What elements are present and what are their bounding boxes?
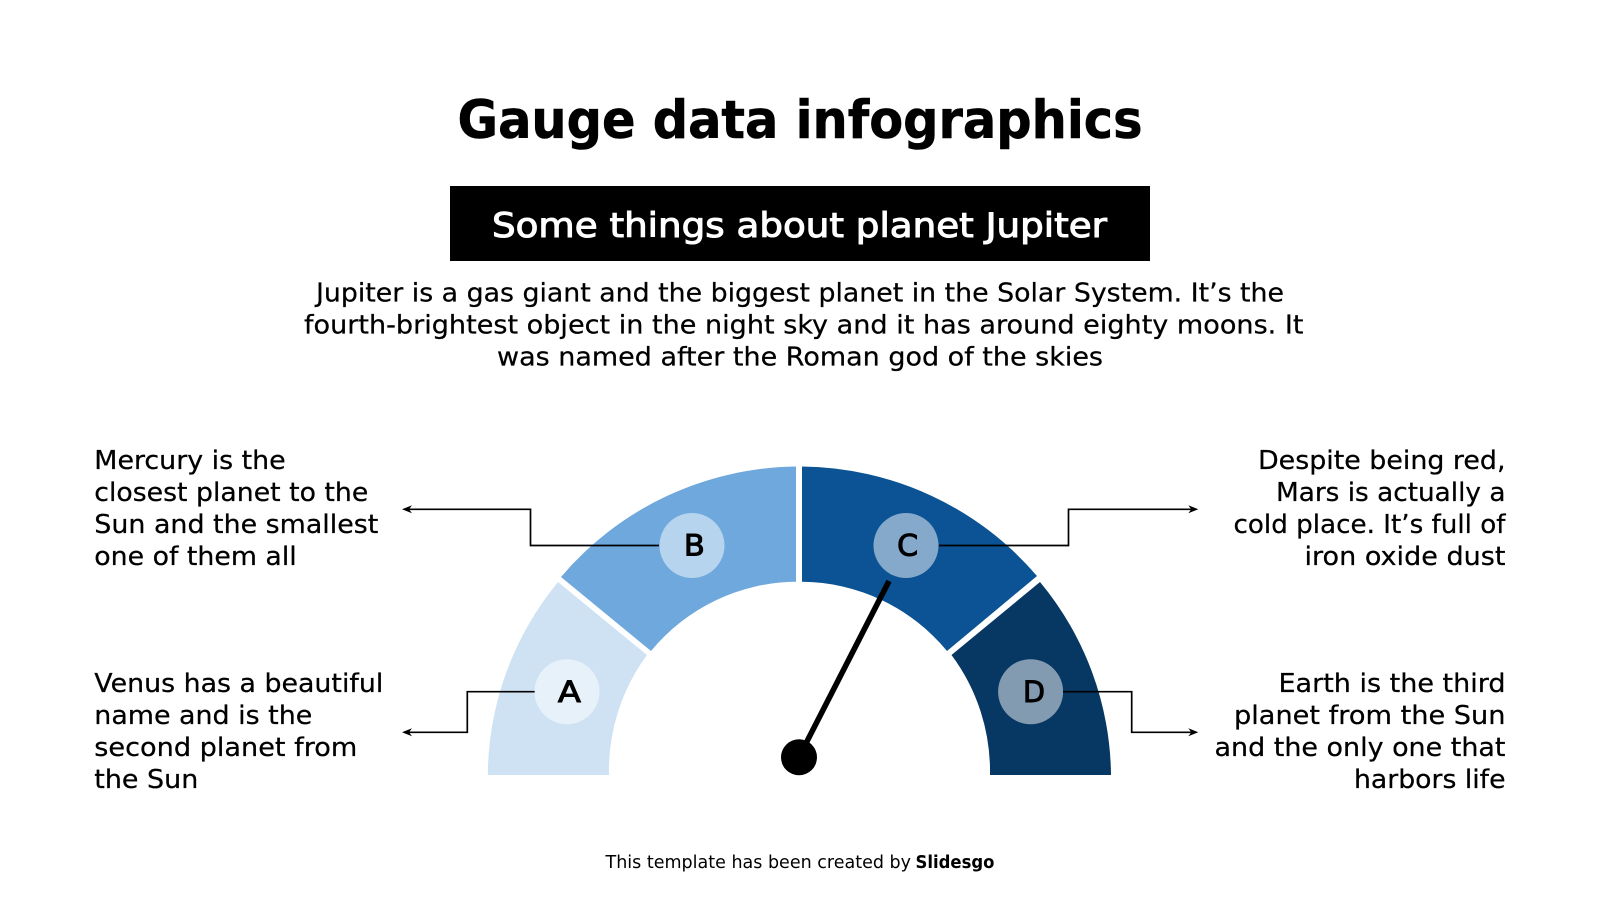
text block: Venus: second planet from [94, 733, 357, 763]
marker A: A [558, 675, 581, 709]
text block: Mercury: one of them all [94, 542, 297, 572]
text block: Mercury: Sun and the smallest [94, 510, 378, 540]
text block: Venus: Venus has a beautiful [94, 669, 383, 699]
marker B [660, 513, 724, 578]
text block: Earth: and the only one that [1214, 733, 1506, 763]
text block: Venus: the Sun [94, 765, 198, 795]
gauge segment D [952, 582, 1111, 775]
arrow: D to Earth text [1063, 692, 1198, 736]
marker C: C [897, 528, 918, 562]
text block: Mercury [94, 446, 378, 572]
text block: Earth: Earth is the third [1278, 669, 1506, 699]
text block: Earth [1214, 669, 1506, 795]
text block: Venus: name and is the [94, 701, 312, 731]
text block: Mercury: Mercury is the [94, 446, 286, 476]
text block: Mars: iron oxide dust [1304, 542, 1506, 572]
gauge segment C [802, 466, 1037, 651]
text block: Mars [1234, 446, 1506, 572]
marker D [998, 659, 1063, 724]
text block: Mars: cold place. It’s full of [1234, 510, 1506, 540]
arrow: B to Mercury text [402, 505, 659, 546]
intro paragraph: was named after the Roman god of the skies [497, 342, 1103, 372]
gauge segment A [488, 582, 647, 775]
marker C [874, 513, 938, 578]
intro paragraph [304, 278, 1304, 372]
intro paragraph: fourth-brightest object in the night sky and it has around eighty moons. It [304, 310, 1304, 340]
arrow: A to Venus text [402, 692, 535, 736]
gauge needle [781, 581, 889, 775]
marker A [534, 659, 600, 724]
title: Gauge data infographics [458, 90, 1142, 151]
text block: Venus [94, 669, 383, 795]
marker B: B [684, 528, 705, 562]
footer credit: This template has been created by [605, 852, 911, 873]
text block: Mars: Mars is actually a [1276, 478, 1506, 508]
intro paragraph: Jupiter is a gas giant and the biggest planet in the Solar System. It’s the [314, 278, 1284, 308]
arrow: C to Mars text [939, 505, 1198, 546]
text block: Earth: planet from the Sun [1234, 701, 1506, 731]
banner: subtitle: Some things about planet Jupiter [492, 206, 1107, 245]
text block: Earth: harbors life [1354, 765, 1506, 795]
gauge segment B [561, 466, 796, 651]
gauge chart [488, 466, 1111, 775]
text block: Mercury: closest planet to the [94, 478, 368, 508]
text block: Mars: Despite being red, [1258, 446, 1506, 476]
marker D: D [1023, 675, 1045, 709]
footer credit: Slidesgo [916, 852, 994, 873]
banner: subtitle [450, 186, 1150, 261]
